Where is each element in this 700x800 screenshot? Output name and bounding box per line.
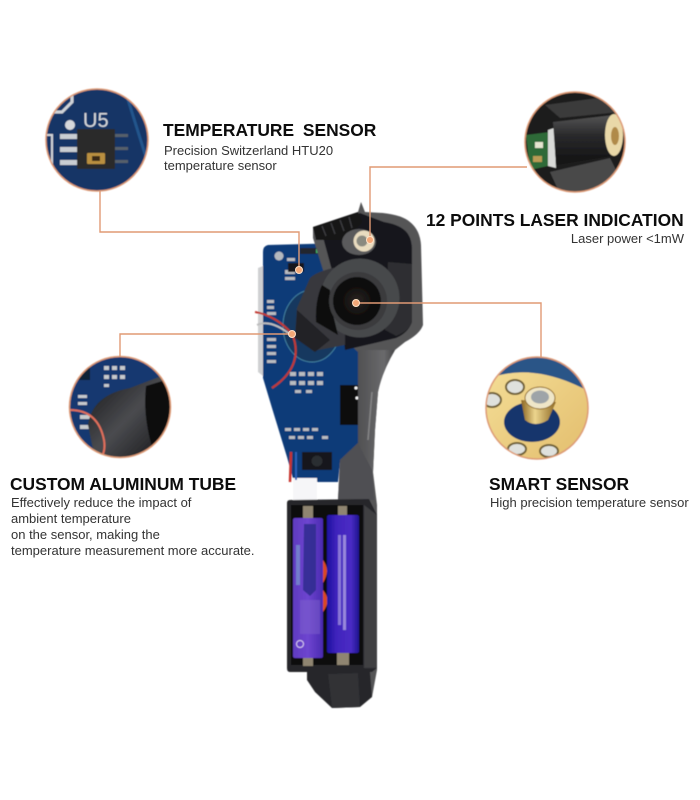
battery left <box>293 518 323 658</box>
heading: smart sensor: SMART SENSOR <box>489 474 629 494</box>
callout dots <box>288 236 374 338</box>
description: aluminum tube <box>11 495 254 558</box>
description: temperature sensor: Precision Switzerland HTU20 <box>164 143 333 158</box>
black housing and grip <box>313 202 423 697</box>
callout lines <box>100 167 541 358</box>
heading: temperature sensor: TEMPERATURE SENSOR <box>163 120 376 140</box>
detail circle: temperature sensor chip: U5 <box>83 110 109 132</box>
description: temperature sensor <box>164 143 333 172</box>
sensor tube barrel <box>295 258 400 352</box>
bottom connector <box>307 672 372 708</box>
description: temperature sensor: temperature sensor <box>164 158 277 172</box>
text block: smart sensor <box>489 474 689 510</box>
blue circuit board <box>263 243 360 500</box>
text block: custom aluminum tube <box>10 474 254 558</box>
description: aluminum tube: temperature measurement more accurate. <box>11 543 254 558</box>
product illustration with callout lines <box>44 88 626 709</box>
device: infrared thermometer <box>255 202 423 708</box>
battery holder <box>287 499 377 672</box>
detail circle: smart sensor <box>483 355 590 461</box>
detail circle: aluminum tube <box>68 355 172 459</box>
blue ring behind tube <box>283 290 341 362</box>
text block: temperature sensor <box>163 120 376 172</box>
detail circle: temperature sensor chip <box>44 88 150 192</box>
battery right <box>327 515 359 653</box>
text block: laser indication <box>426 210 684 246</box>
detail circle: laser module <box>524 90 626 194</box>
description: aluminum tube: ambient temperature <box>11 511 131 526</box>
springs <box>303 506 349 666</box>
laser emitter <box>342 229 376 255</box>
heading: laser indication: 12 POINTS LASER INDICATION <box>426 210 684 230</box>
description: aluminum tube: Effectively reduce the impact of <box>11 495 191 510</box>
grip highlight <box>358 350 395 472</box>
description: aluminum tube: on the sensor, making the <box>11 527 160 542</box>
description: laser power: Laser power <1mW <box>571 231 684 246</box>
wires <box>255 312 296 482</box>
grip ridges <box>313 212 362 240</box>
housing cavity <box>320 213 412 350</box>
heading: aluminum tube: CUSTOM ALUMINUM TUBE <box>10 474 236 494</box>
description: smart sensor: High precision temperature sensor <box>490 495 689 510</box>
silver side strip <box>258 266 263 376</box>
